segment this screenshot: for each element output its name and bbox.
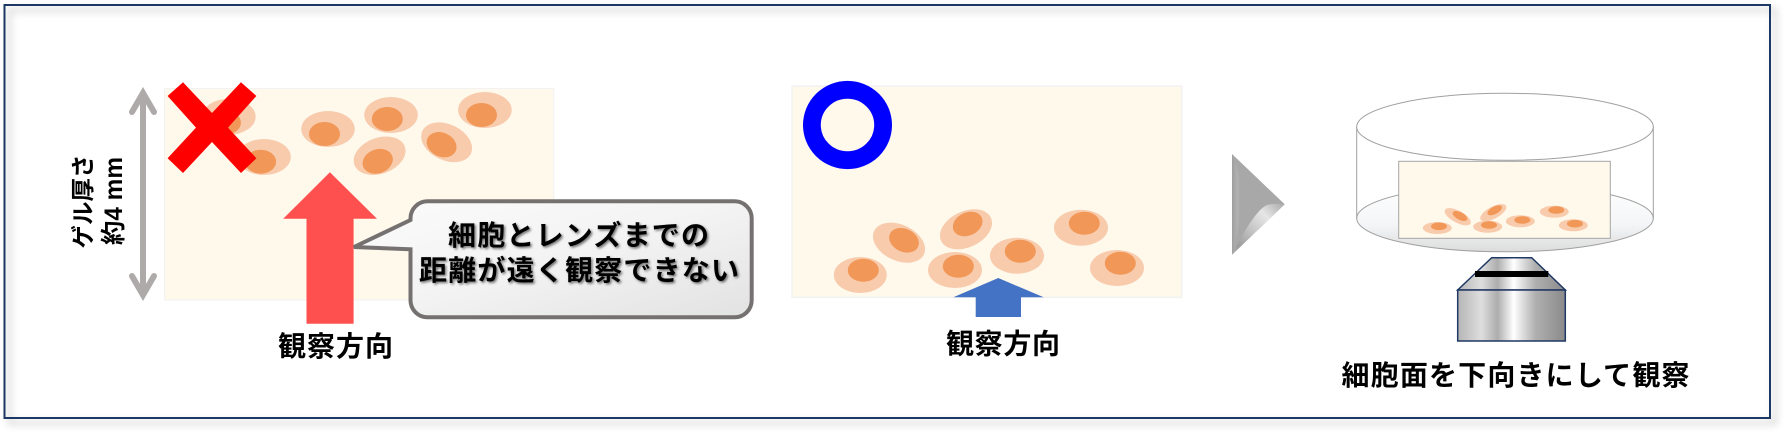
panel: gel viewed from cell side (observable)	[792, 86, 1182, 360]
icon: red cross	[168, 82, 256, 173]
callout: 距離が遠く観察できない	[419, 254, 739, 286]
objective lens	[1458, 258, 1565, 341]
arrow: red observation direction	[283, 172, 377, 324]
panel: inverted dish and objective lens	[1342, 93, 1690, 391]
dish	[1357, 93, 1653, 252]
label: gel thickness	[70, 154, 128, 248]
gel block	[792, 86, 1182, 297]
icon: blue circle	[812, 90, 883, 160]
caption: 細胞面を下向きにして観察	[1342, 360, 1690, 391]
cells near bottom of gel	[834, 201, 1144, 293]
arrow: grey triangle	[1232, 154, 1285, 255]
gel block in dish	[1399, 161, 1610, 238]
cells in dish gel	[1423, 201, 1588, 234]
cells near top of gel	[202, 92, 512, 182]
label: observation direction: 観察方向	[278, 331, 393, 362]
callout: 細胞とレンズまでの	[448, 219, 709, 251]
panel: gel viewed from far side (not observable)	[70, 82, 752, 362]
arrow: gel thickness	[132, 93, 154, 295]
arrow: blue observation direction	[953, 278, 1044, 317]
label: gel thickness: 約4 mm	[100, 157, 128, 245]
gel block	[165, 88, 554, 300]
callout	[354, 201, 752, 317]
label: gel thickness: ゲル厚さ	[70, 154, 96, 248]
label: observation direction: 観察方向	[946, 328, 1060, 360]
